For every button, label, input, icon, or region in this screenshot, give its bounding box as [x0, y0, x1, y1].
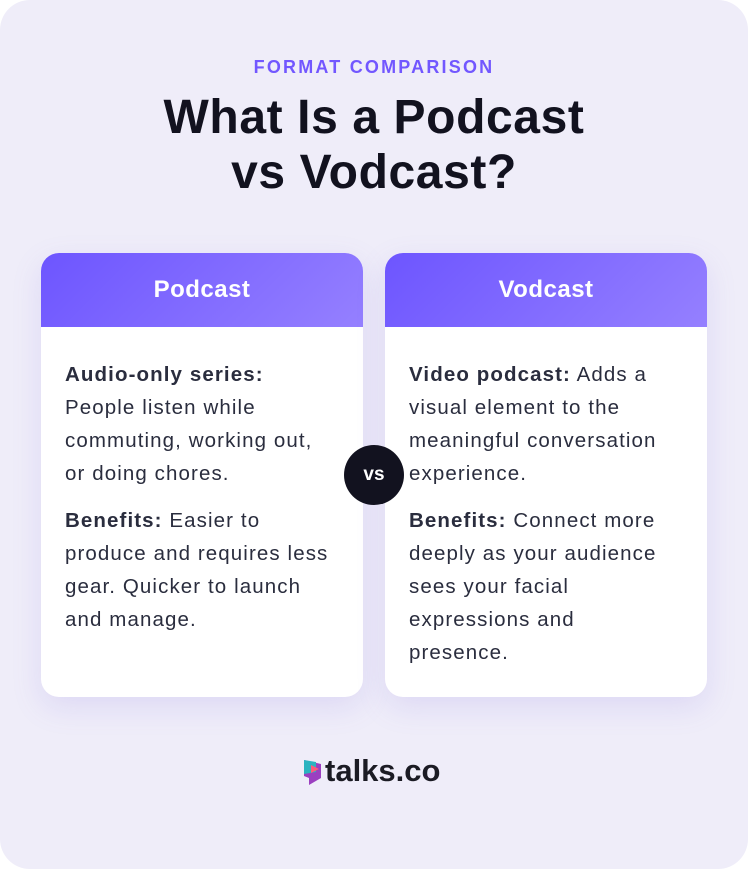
- header: vodcast: Vodcast: [498, 276, 594, 303]
- panel: podcast: [41, 253, 363, 697]
- text: vodcast: sees your facial: [409, 575, 569, 598]
- text: vodcast: experience.: [409, 462, 527, 485]
- text: vodcast: Benefits: Connect more: [409, 509, 655, 532]
- text: vodcast: [409, 363, 657, 664]
- text: podcast: and manage.: [65, 608, 197, 631]
- text: podcast: Audio-only series:: [65, 363, 264, 386]
- logo: talks.co: [325, 753, 440, 788]
- panel: vodcast: [385, 253, 707, 697]
- vs badge: [344, 445, 404, 505]
- text: podcast: gear. Quicker to launch: [65, 575, 301, 598]
- text: podcast: [65, 363, 328, 631]
- header: vodcast: [385, 253, 707, 327]
- header: podcast: Podcast: [154, 276, 250, 303]
- text: vodcast: deeply as your audience: [409, 542, 657, 565]
- title: [164, 91, 584, 199]
- header: podcast: [41, 253, 363, 327]
- text: podcast: produce and requires less: [65, 542, 328, 565]
- text: vodcast: meaningful conversation: [409, 429, 657, 452]
- text: podcast: or doing chores.: [65, 462, 230, 485]
- title: What Is a Podcast: [164, 91, 584, 144]
- text: vodcast: presence.: [409, 641, 509, 664]
- text: podcast: commuting, working out,: [65, 429, 312, 452]
- vs badge: vs: [363, 464, 385, 485]
- text: vodcast: visual element to the: [409, 396, 620, 419]
- kicker: FORMAT COMPARISON: [254, 57, 494, 77]
- text: vodcast: Video podcast: Adds a: [409, 363, 647, 386]
- text: podcast: Benefits: Easier to: [65, 509, 260, 532]
- text: podcast: People listen while: [65, 396, 256, 419]
- title: vs Vodcast?: [231, 146, 517, 199]
- text: vodcast: expressions and: [409, 608, 575, 631]
